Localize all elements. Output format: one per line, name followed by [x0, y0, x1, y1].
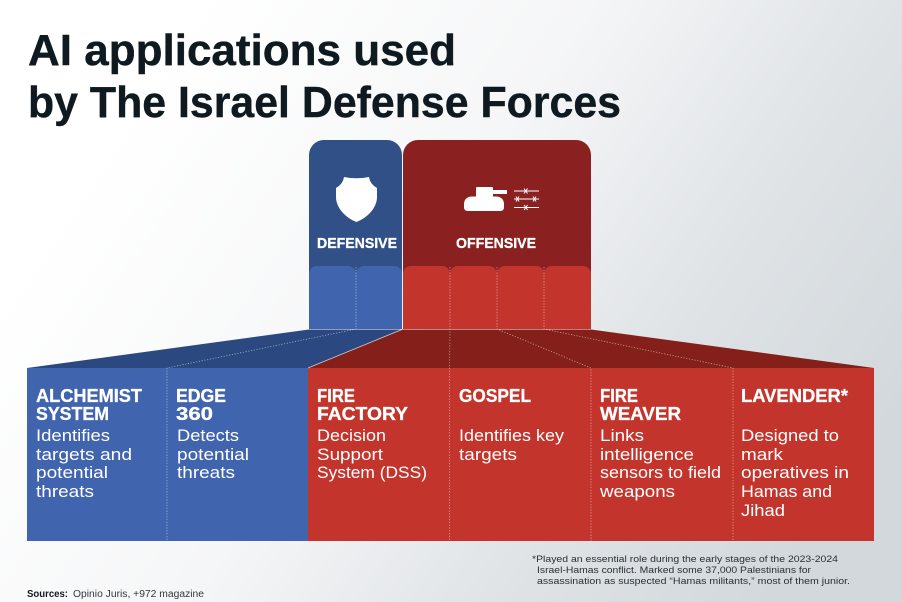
cards: defensive background	[27, 368, 308, 541]
footnote: Israel-Hamas conflict. Marked some 37,000 Palestinians for	[537, 565, 812, 576]
card: Gospel: targets	[459, 446, 517, 464]
card: Alchemist System: threats	[36, 483, 94, 501]
card: Edge 360	[176, 385, 249, 482]
footnote	[532, 554, 850, 587]
title: AI applications used	[28, 26, 456, 75]
card: Fire Weaver: Links	[600, 427, 644, 445]
card: Gospel	[459, 385, 565, 464]
icon: shield	[336, 177, 377, 222]
card: Fire Factory: FACTORY	[317, 403, 409, 424]
card: Fire Factory: Support	[317, 446, 383, 464]
card: Gospel: Identifies key	[459, 427, 565, 445]
card: Fire Weaver: sensors to field	[600, 464, 721, 482]
card: Fire Factory: FIRE	[317, 385, 355, 406]
card: Alchemist System: ALCHEMIST	[36, 385, 143, 406]
card: Lavender: Jihad	[741, 502, 785, 520]
funnel: defensive	[27, 330, 402, 368]
card: Fire Weaver: WEAVER	[600, 403, 681, 424]
cards: offensive background	[308, 368, 874, 541]
card: Edge 360: potential	[177, 446, 249, 464]
card: Alchemist System: potential	[36, 464, 108, 482]
offensive tabs	[403, 266, 591, 329]
card: Alchemist System: Identifies	[36, 427, 110, 445]
card: Lavender: operatives in	[741, 464, 849, 482]
sources: Sources:	[27, 589, 68, 600]
card: Gospel: GOSPEL	[459, 385, 531, 406]
card: Lavender: mark	[741, 446, 784, 464]
card: Lavender: Hamas and	[741, 483, 832, 501]
defensive tabs	[309, 266, 402, 329]
card: Fire Factory: System (DSS)	[317, 464, 427, 482]
label: offensive: OFFENSIVE	[456, 236, 536, 252]
card: Fire Weaver	[599, 385, 721, 501]
funnel: offensive	[308, 330, 874, 368]
card: Fire Weaver: intelligence	[600, 446, 694, 464]
footnote: assassination as suspected “Hamas militants,” most of them junior.	[537, 576, 850, 587]
card: Lavender	[741, 385, 849, 520]
sources: Opinio Juris, +972 magazine	[73, 589, 204, 600]
panel: offensive header	[403, 140, 591, 329]
title	[28, 26, 621, 127]
card: Lavender: Designed to	[741, 427, 839, 445]
card: Edge 360: threats	[177, 464, 235, 482]
panel: defensive header	[309, 140, 402, 329]
icon: tank and barbed wire	[464, 187, 539, 211]
card: Alchemist System: SYSTEM	[36, 403, 109, 424]
label: defensive: DEFENSIVE	[317, 236, 397, 252]
card: Fire Weaver: weapons	[599, 483, 675, 501]
footnote: *Played an essential role during the early stages of the 2023-2024	[532, 554, 839, 565]
card: Alchemist System: targets and	[36, 446, 132, 464]
card: Fire Factory	[317, 385, 427, 482]
card: Edge 360: Detects	[177, 427, 239, 445]
title: by The Israel Defense Forces	[28, 78, 621, 127]
card: Fire Factory: Decision	[317, 427, 386, 445]
card: Edge 360: 360	[176, 403, 213, 424]
card: Fire Weaver: FIRE	[600, 385, 638, 406]
card: Alchemist System	[36, 385, 143, 501]
card: Lavender: LAVENDER*	[741, 385, 849, 406]
card: Edge 360: EDGE	[176, 385, 226, 406]
